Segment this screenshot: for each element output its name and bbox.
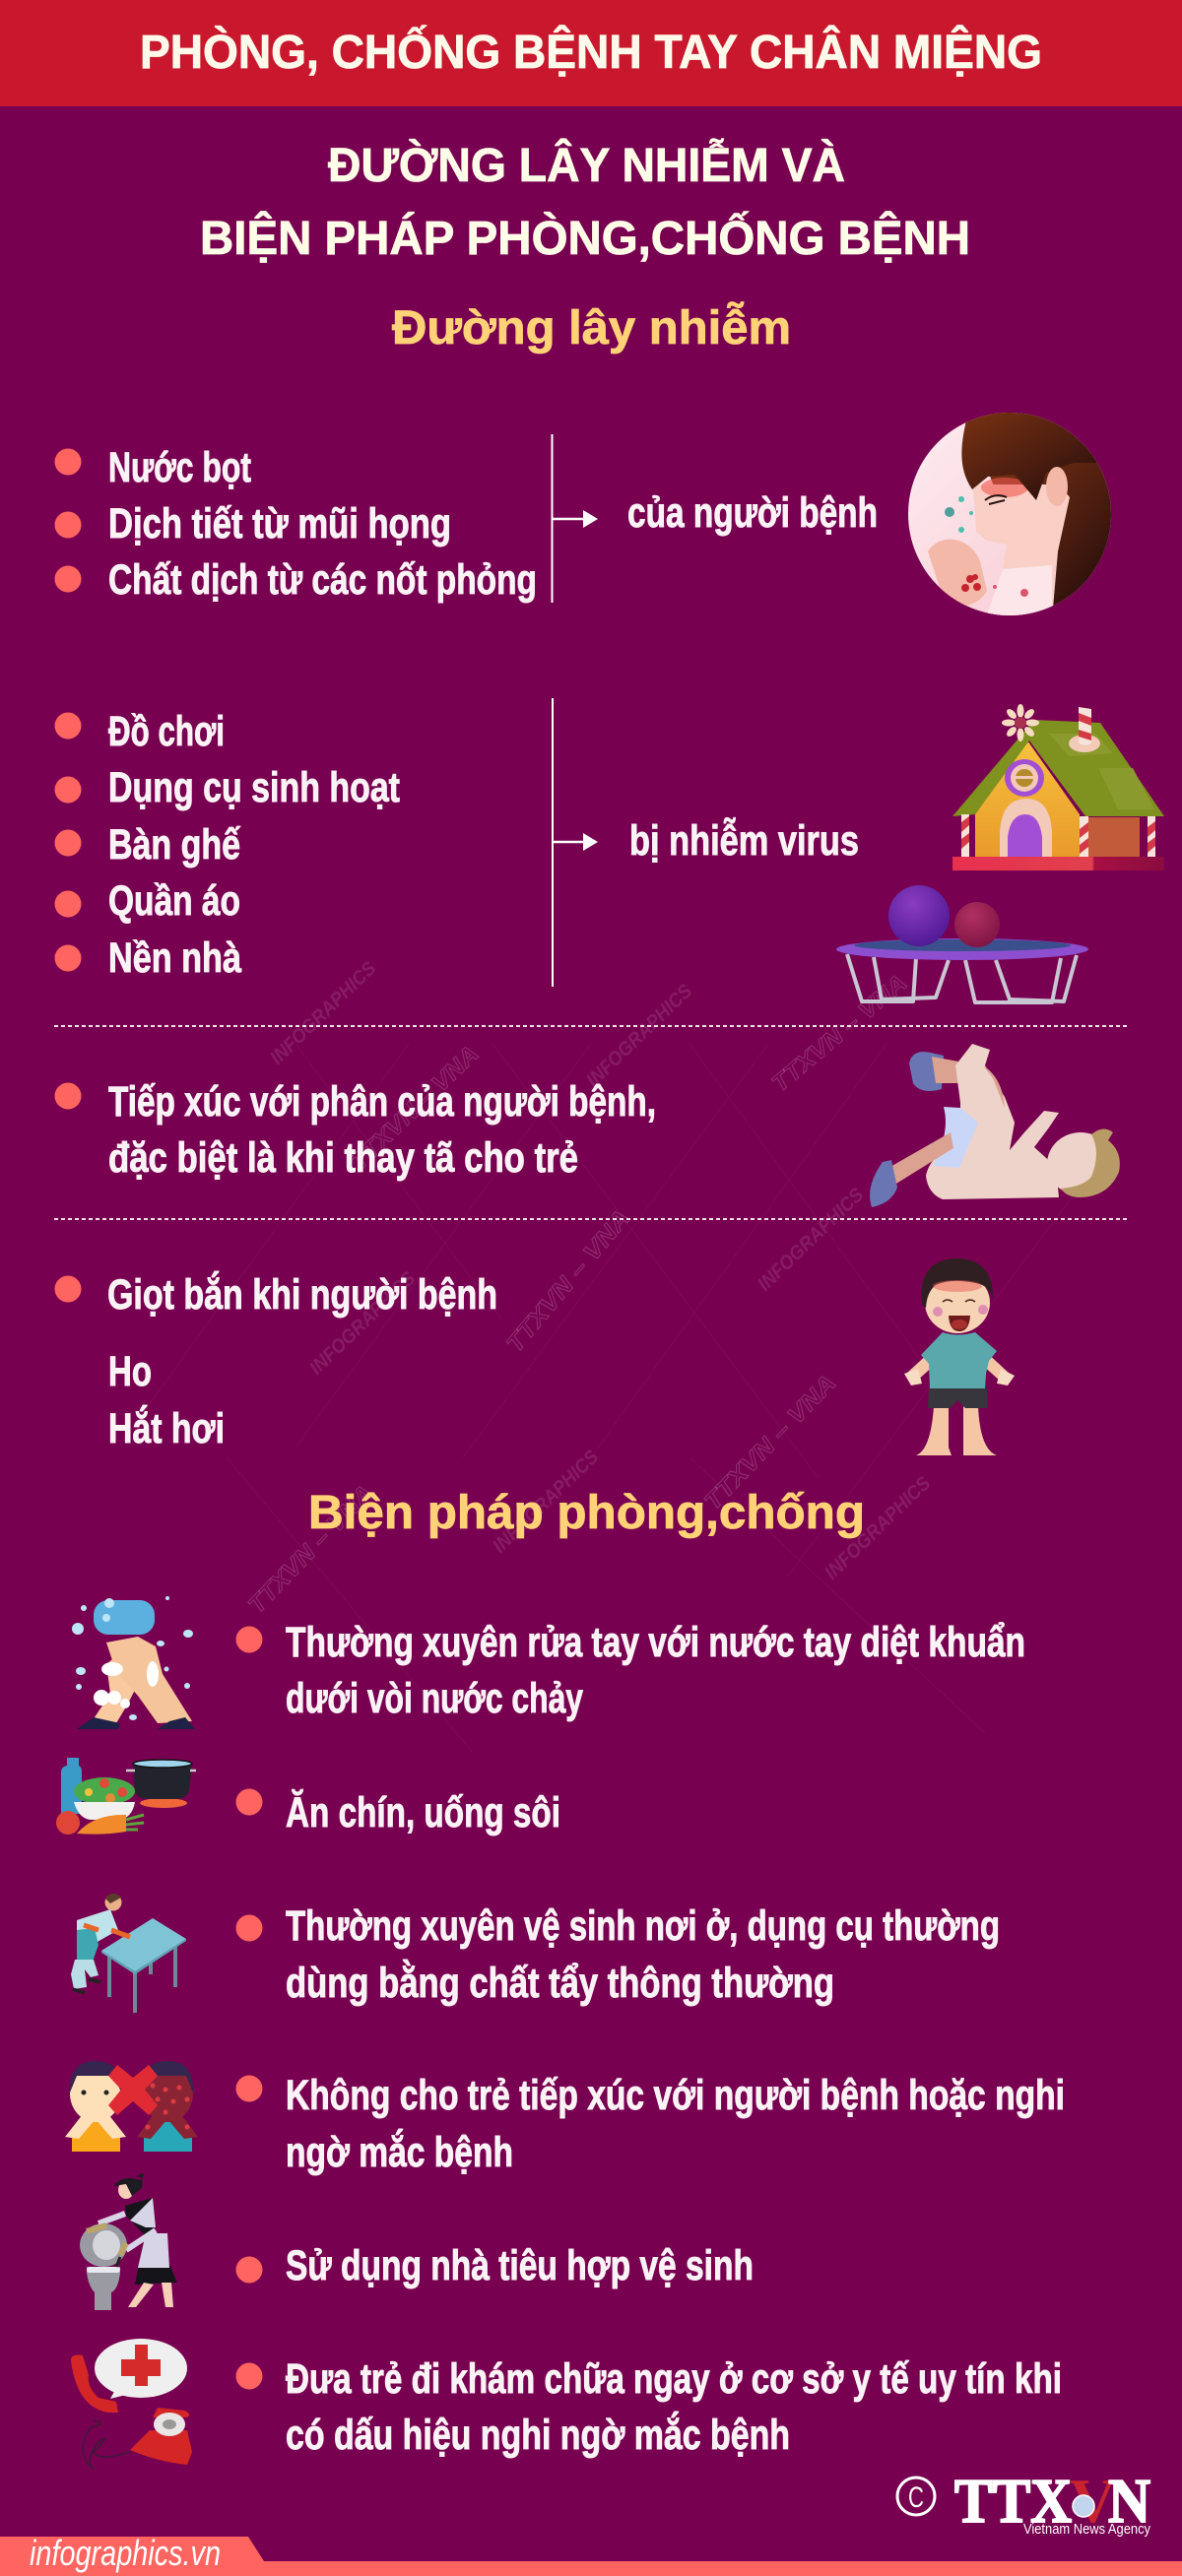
group: contaminated objects: Nền nhà [108, 934, 242, 982]
source url: infographics.vn [30, 2533, 221, 2573]
watermarks: INFOGRAPHICS [754, 1184, 869, 1296]
section heading: transmission routes: Đường lây nhiễm [392, 301, 791, 354]
watermarks: TTXVN – VNA [345, 1041, 484, 1176]
logo: TTXVN copyright mark: TTX [954, 2466, 1072, 2536]
icon: washing hands [72, 1596, 195, 1729]
bullet text: hygienic latrine: Sử dụng nhà tiêu hợp vệ sinh [286, 2242, 754, 2289]
icon: coughing woman [906, 409, 1118, 620]
bullet text: avoid contact [236, 2072, 1065, 2176]
bullet text: hand washing: dưới vòi nước chảy [286, 1675, 583, 1722]
icon: no contact between children [65, 2061, 198, 2152]
watermarks: INFOGRAPHICS [821, 1472, 936, 1584]
group: contaminated objects: Bàn ghế [108, 821, 240, 869]
group: contaminated objects: Đồ chơi [108, 708, 225, 755]
bullet text: cleaning [236, 1902, 1000, 2007]
section heading: prevention: Biện pháp phòng,chống [308, 1487, 865, 1539]
logo: TTXVN copyright mark: N [1108, 2466, 1150, 2536]
watermarks: TTXVN – VNA [767, 970, 912, 1098]
bullet text: hand washing [236, 1619, 1025, 1722]
logo: TTXVN copyright mark: Vietnam News Agency [1023, 2521, 1150, 2538]
group: contaminated objects [55, 708, 400, 982]
watermarks [118, 957, 1084, 1753]
group: contact with feces: đặc biệt là khi thay tã cho trẻ [108, 1134, 578, 1182]
icon: food and boiling pot [56, 1758, 196, 1835]
subtitle heading: BIỆN PHÁP PHÒNG,CHỐNG BỆNH [200, 211, 970, 265]
icon: person cleaning table [71, 1894, 186, 2013]
group: bodily fluids: Nước bọt [108, 444, 251, 491]
group: contaminated objects: Quần áo [108, 877, 240, 925]
watermarks: INFOGRAPHICS [266, 957, 381, 1069]
arrow: fluids to patient [552, 434, 598, 603]
logo: TTXVN copyright mark: C [908, 2481, 924, 2514]
bullet text: cooked food: Ăn chín, uống sôi [286, 1789, 560, 1836]
footer band with site tab [0, 2533, 1182, 2576]
logo: TTXVN copyright mark: V [1070, 2466, 1116, 2536]
bullet text: cooked food [236, 1788, 560, 1836]
icon: cleaning toilet [80, 2173, 177, 2310]
subtitle heading: ĐƯỜNG LÂY NHIỄM VÀ [328, 138, 845, 192]
logo: TTXVN copyright mark [897, 2466, 1150, 2538]
arrow: objects to virus [553, 698, 598, 987]
bullet text: cleaning: dùng bằng chất tẩy thông thường [286, 1959, 834, 2007]
group: contact with feces [55, 1078, 656, 1182]
icon: sick child [904, 1258, 1015, 1455]
group: droplets: Ho [108, 1348, 152, 1395]
bullet text: go to clinic: có dấu hiệu nghi ngờ mắc bệnh [286, 2411, 790, 2459]
watermarks: INFOGRAPHICS [305, 1267, 421, 1380]
group: contact with feces: Tiếp xúc với phân của người bệnh, [108, 1078, 656, 1126]
icon: emergency phone call [71, 2339, 192, 2470]
icon: changing baby diaper [870, 1044, 1120, 1207]
label: of the patient: của người bệnh [627, 489, 878, 537]
group: contaminated objects: Dụng cụ sinh hoạt [108, 764, 400, 811]
group: droplets [55, 1270, 497, 1452]
subtitle heading [200, 138, 970, 265]
bullet text: avoid contact: ngờ mắc bệnh [286, 2128, 513, 2176]
label: infected with virus: bị nhiễm virus [629, 816, 859, 865]
group: droplets: Giọt bắn khi người bệnh [107, 1270, 497, 1319]
icon: toy house [952, 704, 1164, 870]
watermarks: INFOGRAPHICS [489, 1446, 604, 1558]
group: bodily fluids: Chất dịch từ các nốt phỏng [108, 556, 537, 604]
divider [54, 1025, 1128, 1027]
header banner [0, 0, 1182, 106]
bullet text: go to clinic [236, 2355, 1062, 2459]
title: PHÒNG, CHỐNG BỆNH TAY CHÂN MIỆNG [140, 25, 1042, 79]
divider [54, 1218, 1128, 1220]
watermarks: TTXVN – VNA [501, 1205, 635, 1358]
watermarks: INFOGRAPHICS [582, 980, 697, 1092]
watermarks: TTXVN – VNA [699, 1370, 841, 1515]
group: bodily fluids [55, 444, 537, 604]
icon: balls on trampoline [836, 885, 1088, 1002]
group: droplets: Hắt hơi [108, 1404, 225, 1452]
watermarks: TTXVN – VNA [243, 1480, 378, 1619]
group: bodily fluids: Dịch tiết từ mũi họng [108, 500, 451, 547]
